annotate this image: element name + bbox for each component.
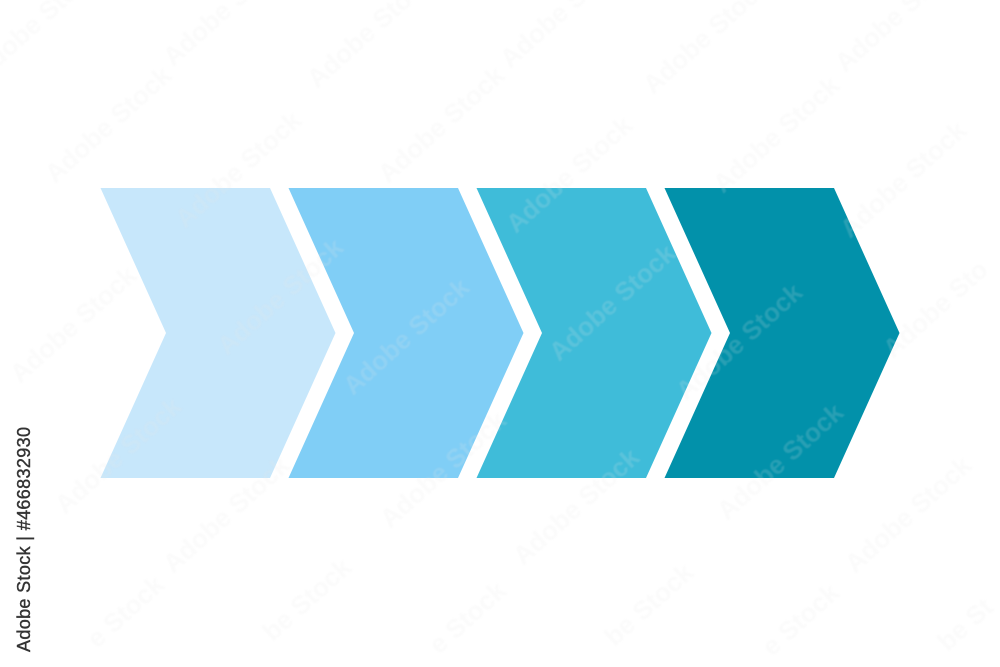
- repeated stock watermark pattern: e Stock: [81, 569, 170, 653]
- repeated stock watermark pattern: Adobe Stock: [169, 105, 307, 234]
- repeated stock watermark pattern: Adobe Stock: [707, 70, 845, 199]
- repeated stock watermark pattern: be Stock: [256, 552, 357, 647]
- repeated stock watermark pattern: Adobe Stock: [39, 60, 177, 189]
- repeated stock watermark pattern: be St: [931, 592, 999, 657]
- repeated stock watermark pattern: e Stock: [756, 577, 845, 661]
- repeated stock watermark pattern: Adobe Stock: [211, 232, 349, 361]
- repeated stock watermark pattern: Adobe Stock: [670, 277, 808, 406]
- repeated stock watermark pattern: Adobe Stock: [834, 115, 972, 244]
- repeated stock watermark pattern: Adobe Stock: [839, 450, 977, 579]
- repeated stock watermark pattern: Adobe Sto: [877, 254, 994, 363]
- repeated stock watermark pattern: Adobe Stock: [337, 272, 475, 401]
- repeated stock watermark pattern: e Stock: [423, 575, 512, 659]
- chevron step 2: sky blue: [288, 188, 524, 478]
- repeated stock watermark pattern: Adobe Stock: [500, 110, 638, 239]
- vertical stock credit: Adobe Stock | #466832930: [14, 427, 34, 652]
- repeated stock watermark pattern: Adobe Stock: [49, 391, 187, 520]
- repeated stock watermark pattern: Adobe Stock: [507, 442, 645, 571]
- repeated stock watermark pattern: Adobe Stock: [543, 238, 681, 367]
- repeated stock watermark pattern: Adobe Stock: [374, 405, 512, 534]
- chevron step 4: dark teal: [664, 188, 900, 478]
- chevron step 1: pale blue: [100, 188, 336, 478]
- chevron step 3: cyan: [476, 188, 712, 478]
- repeated stock watermark pattern: Adobe Stock: [157, 450, 295, 579]
- repeated stock watermark pattern: be Stock: [598, 557, 699, 652]
- chevron process: four steps: [100, 188, 900, 478]
- repeated stock watermark pattern: Adobe Stock: [711, 397, 849, 526]
- repeated stock watermark pattern: Adobe Stock: [4, 260, 142, 389]
- repeated stock watermark pattern: Adobe Stock: [372, 60, 510, 189]
